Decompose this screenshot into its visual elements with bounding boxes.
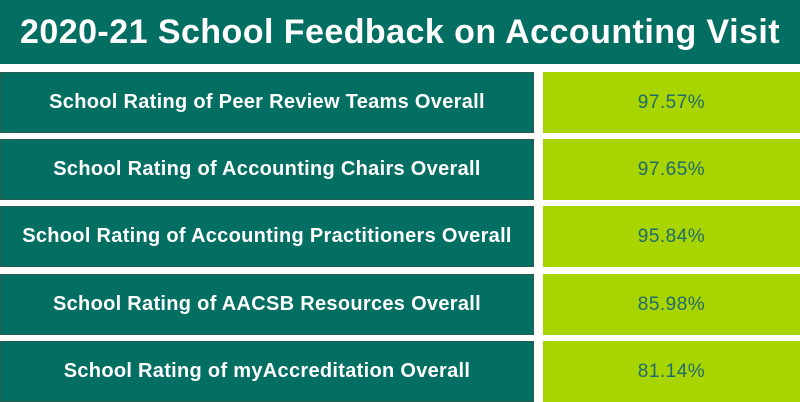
- row 2 label: School Rating of Accounting Chairs Overall: [53, 158, 481, 180]
- row 5 value: [543, 341, 800, 402]
- row 3 label: School Rating of Accounting Practitioners Overall: [22, 225, 512, 247]
- row 3 label: [0, 206, 534, 267]
- row 2 value: [543, 139, 800, 200]
- row 5 label: [0, 341, 534, 402]
- row 3 value: [543, 206, 800, 267]
- title: 2020-21 School Feedback on Accounting Visit: [20, 13, 780, 51]
- row 4 value: [543, 274, 800, 335]
- row 4 label: [0, 274, 534, 335]
- row 4 value: 85.98%: [638, 294, 705, 315]
- row 2 label: [0, 139, 534, 200]
- title: [0, 0, 800, 64]
- row 1 label: [0, 72, 534, 133]
- row 1 value: 97.57%: [638, 92, 705, 113]
- row 4 label: School Rating of AACSB Resources Overall: [53, 293, 481, 315]
- row 5 label: School Rating of myAccreditation Overall: [64, 360, 470, 382]
- row 3 value: 95.84%: [638, 226, 705, 247]
- row 1 value: [543, 72, 800, 133]
- row 1 label: School Rating of Peer Review Teams Overall: [49, 91, 485, 113]
- row 5 value: 81.14%: [638, 361, 705, 382]
- row 2 value: 97.65%: [638, 159, 705, 180]
